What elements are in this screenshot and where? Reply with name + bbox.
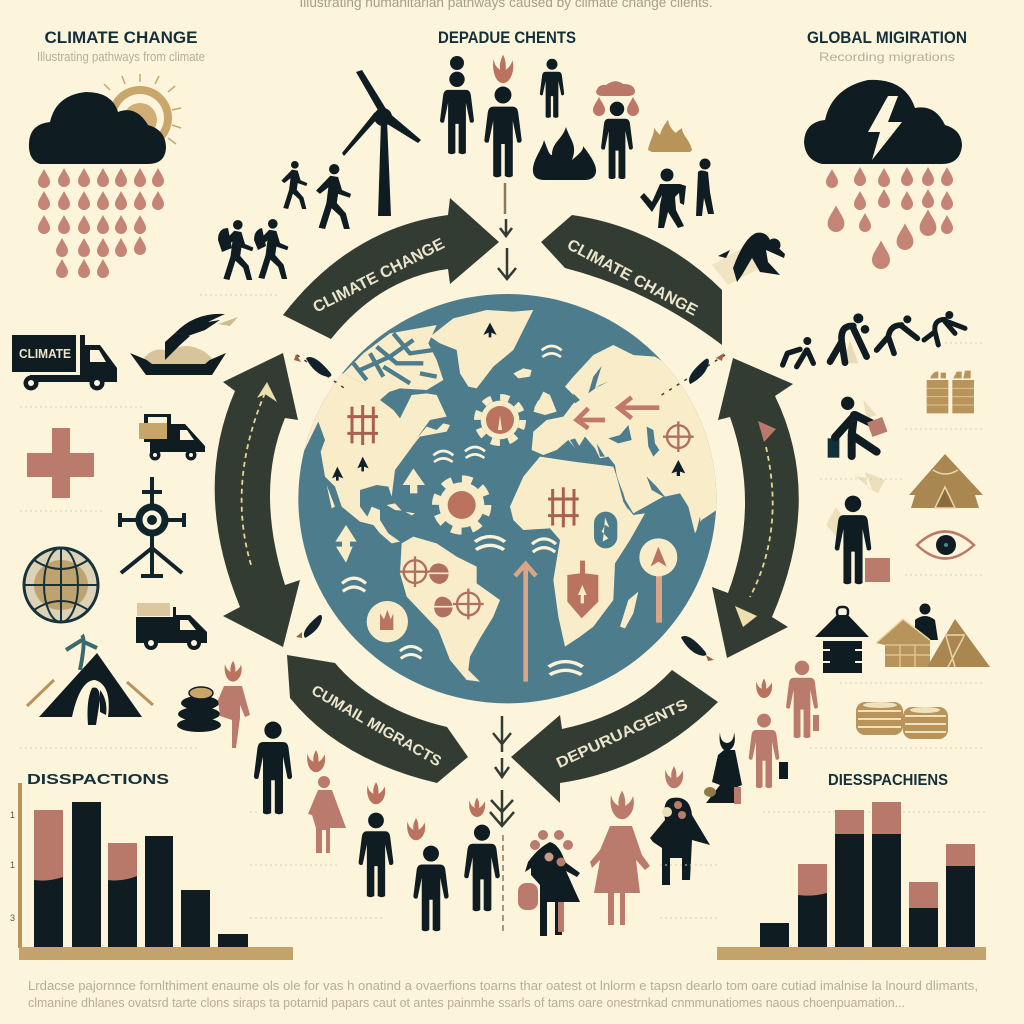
people: refugee woman with bag	[518, 830, 580, 936]
bar chart: left	[10, 783, 293, 960]
inland seas	[570, 366, 702, 538]
land masses	[290, 310, 747, 682]
people: running group	[218, 161, 351, 280]
land: greenland	[430, 310, 533, 388]
fence: north america	[347, 405, 378, 445]
land: africa	[510, 457, 645, 647]
icon: large dark fire	[533, 127, 596, 180]
people: walking pair upper right	[640, 158, 714, 228]
heading: climate change: CLIMATE CHANGE	[44, 28, 198, 47]
cream up arrows	[335, 468, 425, 563]
bar chart: left: 3	[10, 913, 15, 923]
person: bending over rubble	[712, 232, 785, 285]
arrow: bottom left climate impacts	[287, 655, 468, 783]
dashed leaders and leaves	[294, 353, 725, 661]
gear: lower	[436, 479, 488, 531]
icon: storm cloud with lightning	[804, 80, 962, 269]
gear: upper	[477, 397, 523, 443]
marker: circle lower left	[367, 601, 408, 642]
heading: departure events: DEPADUE CHENTS	[438, 28, 576, 47]
land: south america	[400, 537, 500, 682]
icon: globe grid	[24, 548, 98, 622]
faint caption rows	[20, 295, 985, 918]
person: pink with bag right	[756, 661, 819, 738]
icon: black house	[815, 607, 869, 673]
arrow: right circular	[712, 358, 799, 658]
people: bending workers	[783, 311, 965, 367]
heading: global migration: Recording migrations	[819, 50, 955, 64]
fence: africa	[548, 487, 579, 527]
people: central group	[440, 56, 633, 179]
chart heading: right: DIESSPACHIENS	[828, 772, 948, 789]
icon: eye	[917, 532, 974, 558]
land: iceland and britain	[513, 368, 557, 415]
icon: coin stack right	[856, 702, 948, 739]
arrow: top left climate change	[283, 198, 499, 339]
pink arrows	[577, 397, 659, 428]
long peach arrow	[515, 564, 536, 682]
people: lower centre group	[254, 722, 500, 931]
land: eurasia	[532, 345, 716, 534]
icon: truck labelled climate	[12, 335, 117, 390]
waves	[342, 346, 583, 675]
markers: small dark pins	[332, 323, 685, 481]
icon: tent shelter left	[27, 635, 153, 725]
bar chart: right	[717, 802, 986, 960]
connector arrows: bottom	[490, 716, 514, 935]
icon: coin stack and figure left	[177, 661, 250, 748]
heading: global migration	[807, 28, 967, 64]
icon: wind turbine	[342, 70, 421, 216]
icon: crosshair	[120, 477, 184, 576]
arrow: bottom left climate impacts: CUMAIL MIGRACTS	[308, 682, 444, 770]
arrow: top right climate change: CLIMATE CHANGE	[564, 236, 700, 320]
targets: south america	[400, 556, 484, 619]
bar chart: left: 1	[10, 810, 15, 820]
icon: supply boxes	[927, 371, 974, 413]
land: madagascar and islands	[327, 485, 638, 628]
heading: climate change	[37, 28, 205, 64]
heading: climate change: Illustrating pathways from climate	[37, 49, 205, 64]
connector arrows: top	[498, 183, 516, 279]
people: right lower figures	[704, 714, 788, 804]
land: arctic islands	[343, 325, 443, 395]
person: pink woman with flame	[590, 791, 650, 925]
icon: small truck	[139, 414, 205, 460]
person: hooded figure	[650, 766, 710, 885]
icon: houses and tent	[876, 604, 990, 667]
marker: teal pill	[594, 512, 617, 548]
icon: boat	[130, 314, 238, 375]
chart heading: left: DISSPACTIONS	[27, 771, 169, 788]
icon: rain cloud with sun	[29, 74, 181, 278]
arrow: left circular	[215, 353, 300, 647]
footer text	[28, 978, 978, 1010]
person: standing with suitcase	[826, 496, 890, 584]
arctic channels	[353, 333, 437, 383]
heading: global migration: GLOBAL MIGIRATION	[807, 28, 967, 47]
icon: lower truck	[136, 603, 207, 650]
icon: cream leaf right	[855, 472, 885, 493]
icon: tent right	[909, 454, 983, 508]
footer text: Lrdacse pajornnce fornlthiment enaume ols ole for vas h onatind a ovaerfions toarns thar oatest ot lnlorm e tapsn dearlo tom oare cutiad imalnise la lnourd dlimants,	[28, 978, 978, 993]
person: carrying box	[828, 397, 887, 458]
target: far right	[663, 421, 694, 452]
marker: circle right with stem	[639, 538, 677, 623]
icon: medical cross	[27, 428, 94, 498]
arrow: top left climate change: CLIMATE CHANGE	[311, 235, 448, 316]
icon: truck labelled climate: CLIMATE	[19, 346, 71, 361]
bar chart: left: 1	[10, 860, 15, 870]
footer text: clmanine dhlanes ovatsrd tarte clons siraps ta potarnid papars caut ot antes painmhe ssarls of tams oare onestrnkad cnmmunatiomes naous choenpuamation...	[28, 995, 905, 1010]
globe	[290, 294, 747, 703]
land: north america	[290, 373, 450, 543]
arrow: top right climate change	[541, 215, 722, 345]
icons: flame and cloud near central group	[493, 55, 692, 152]
arrow: bottom right displacements: DEPURUAGENTS	[554, 696, 690, 772]
marker: pink shield	[567, 561, 598, 618]
arrow: bottom right displacements	[511, 670, 718, 803]
